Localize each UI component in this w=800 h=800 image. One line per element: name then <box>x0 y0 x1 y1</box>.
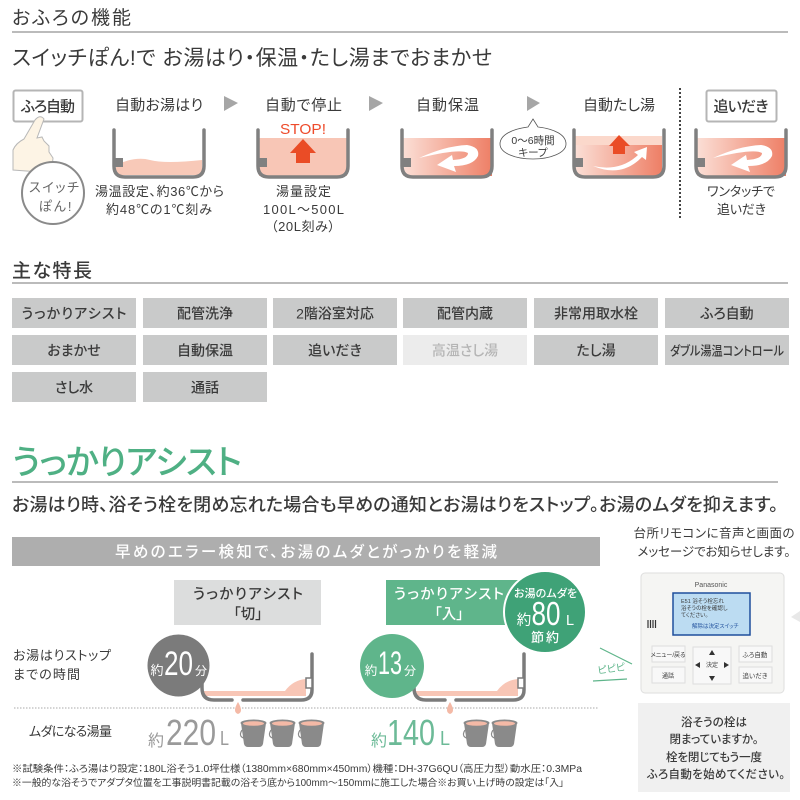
kitchen remote: 通話 <box>662 672 674 680</box>
heading: おふろの機能: おふろの機能 <box>12 7 131 29</box>
step 2: 自動で停止: 自動で停止 <box>265 97 342 114</box>
panel: assist off: 220 <box>166 712 216 753</box>
step 1: 自動お湯はり: 湯温設定、約36℃から <box>95 184 224 199</box>
feature tags: 非常用取水栓 <box>554 306 638 322</box>
row labels <box>13 648 112 739</box>
time circle <box>360 634 424 698</box>
heading: うっかりアシスト: うっかりアシスト <box>12 444 242 482</box>
panel: assist on: 約 <box>517 612 531 629</box>
feature tags: ダブル湯温コントロール <box>670 344 784 358</box>
step 2: 自動で停止 <box>258 97 348 234</box>
kitchen remote: Panasonic <box>695 582 728 589</box>
step 2: 自動で停止: 100L～500L <box>263 202 344 217</box>
banner: 早めのエラー検知で、お湯のムダとがっかりを軽減 <box>115 542 497 561</box>
switch circle <box>22 162 84 224</box>
message panel: 閉まっていますか。 <box>670 733 758 746</box>
arrow <box>369 96 383 111</box>
message panel <box>638 703 790 792</box>
water and tub <box>416 679 518 696</box>
panel: assist off <box>148 580 324 753</box>
icon: beep sound <box>593 648 632 681</box>
kitchen remote: メニュー/戻る <box>650 652 686 659</box>
remote caption <box>634 526 794 559</box>
button: ふろ自動 with hand and switch: スイッチ <box>29 180 79 195</box>
message panel: 浴そうの栓は <box>681 715 747 729</box>
step 3: 自動保温: 自動保温 <box>416 97 479 114</box>
step 3: 自動保温 <box>402 97 492 177</box>
panel: assist off: うっかりアシスト <box>193 586 303 603</box>
feature tags: 2階浴室対応 <box>296 306 374 322</box>
step 2: 自動で停止: （20L刻み） <box>271 219 335 234</box>
footnotes: ※試験条件：ふろ湯はり設定：180L浴そう1.0坪仕様（1380mm×680mm×450mm）機種：DH-37G6QU（高圧力型）動水圧：0.3MPa <box>12 762 583 775</box>
panel: assist off: L <box>220 728 229 750</box>
feature tags: 配管内蔵 <box>437 306 493 322</box>
feature tags: 配管洗浄 <box>177 306 233 322</box>
heading: 主な特長: 主な特長 <box>12 260 92 282</box>
kitchen remote <box>641 573 800 693</box>
kitchen remote: ふろ自動 <box>742 650 768 659</box>
arrow <box>224 96 238 111</box>
kitchen remote: E51 浴そう栓忘れ <box>681 597 724 605</box>
feature tags: 追いだき <box>308 342 362 358</box>
message panel: ふろ自動を始めてください。 <box>646 767 785 781</box>
button: ふろ自動 with hand and switch: ふろ自動 <box>20 98 75 116</box>
remote caption: メッセージでお知らせします。 <box>638 545 790 559</box>
step 1: 自動お湯はり: 自動お湯はり <box>115 97 203 114</box>
step 1: 自動お湯はり <box>95 97 224 217</box>
feature tags: たし湯 <box>576 342 616 358</box>
step 2: 自動で停止: 湯量設定 <box>276 184 331 199</box>
kitchen remote: 決定 <box>706 661 718 669</box>
feature tags: うっかりアシスト <box>22 306 126 322</box>
banner <box>12 537 600 566</box>
button: ふろ自動 with hand and switch: ぽん! <box>38 199 72 214</box>
time circle <box>148 634 210 696</box>
button: ふろ自動 with hand and switch <box>13 90 84 224</box>
panel: assist off: 分 <box>195 664 207 678</box>
kitchen remote: てください。 <box>681 612 708 619</box>
panel: assist off: 20 <box>164 645 193 683</box>
panel: assist on: うっかりアシスト <box>394 586 504 603</box>
panel: assist on: 分 <box>404 664 416 678</box>
saving badge <box>504 571 586 653</box>
panel: assist on: 80 <box>532 595 560 632</box>
button and tub: 追いだき: 追いだき <box>714 98 768 116</box>
description: お湯はり時、浴そう栓を閉め忘れた場合も早めの通知とお湯はりをストップ。お湯のムダを抑えます。 <box>12 495 778 515</box>
panel: assist on: 約 <box>365 663 377 678</box>
footnotes: ※一般的な浴そうでアダプタ位置を工事説明書記載の浴そう底から100mm～150mmに施工した場合※お買い上げ時の設定は「入」 <box>12 776 564 789</box>
saved volume: 約 <box>371 732 387 750</box>
kitchen remote: 解除は決定スイッチ <box>692 622 739 630</box>
water and tub <box>204 679 306 696</box>
row labels: ムダになる湯量 <box>29 724 112 739</box>
step 4: 自動たし湯: 自動たし湯 <box>583 97 655 114</box>
message panel: 栓を閉じてもう一度 <box>666 750 762 764</box>
panel: assist on <box>360 571 586 753</box>
panel: assist on: L <box>440 728 450 750</box>
feature tags: 自動保温 <box>177 342 233 358</box>
kitchen remote: 浴そうの栓を確認し <box>681 604 728 612</box>
feature tags: ふろ自動 <box>700 306 754 322</box>
panel: assist on: お湯のムダを <box>514 586 577 600</box>
row labels: お湯はりストップ <box>13 648 111 663</box>
divider <box>679 88 681 220</box>
feature tags: 通話 <box>191 380 219 396</box>
wasted volume: 約 <box>148 732 164 750</box>
kitchen remote: 追いだき <box>743 671 767 680</box>
icon: hand <box>13 117 53 172</box>
feature tags: おまかせ <box>47 342 101 358</box>
step 1: 自動お湯はり: 約48℃の1℃刻み <box>106 202 212 217</box>
bubble: 0〜6時間キープ: 0～6時間 <box>511 135 555 147</box>
panel: assist off: 「切」 <box>234 606 262 623</box>
panel: assist off: 約 <box>150 663 164 678</box>
panel: assist on: 「入」 <box>434 606 464 623</box>
footnotes <box>12 762 583 789</box>
icon: beep sound: ピピピ <box>597 661 627 677</box>
button and tub: 追いだき: ワンタッチで <box>707 184 776 199</box>
subheading: スイッチぽん!で お湯はり・保温・たし湯までおまかせ <box>12 47 492 70</box>
remote caption: 台所リモコンに音声と画面の <box>634 526 794 540</box>
panel: assist on: 13 <box>378 645 402 681</box>
bubble: 0〜6時間キープ <box>500 119 566 159</box>
arrow <box>527 96 540 111</box>
bubble: 0〜6時間キープ: キープ <box>518 147 548 159</box>
panel: assist on: L <box>566 613 574 629</box>
step 2: 自動で停止: STOP! <box>280 121 326 138</box>
button and tub: 追いだき: 追いだき <box>717 202 766 217</box>
feature tags: 高温さし湯 <box>432 342 498 358</box>
panel: assist on: 節約 <box>531 630 559 645</box>
button and tub: 追いだき <box>696 90 786 217</box>
feature tags <box>12 298 789 402</box>
panel: assist on: 140 <box>387 712 435 753</box>
row labels: までの時間 <box>13 667 80 682</box>
feature tags: さし水 <box>55 380 93 396</box>
step 4: 自動たし湯 <box>574 97 664 177</box>
